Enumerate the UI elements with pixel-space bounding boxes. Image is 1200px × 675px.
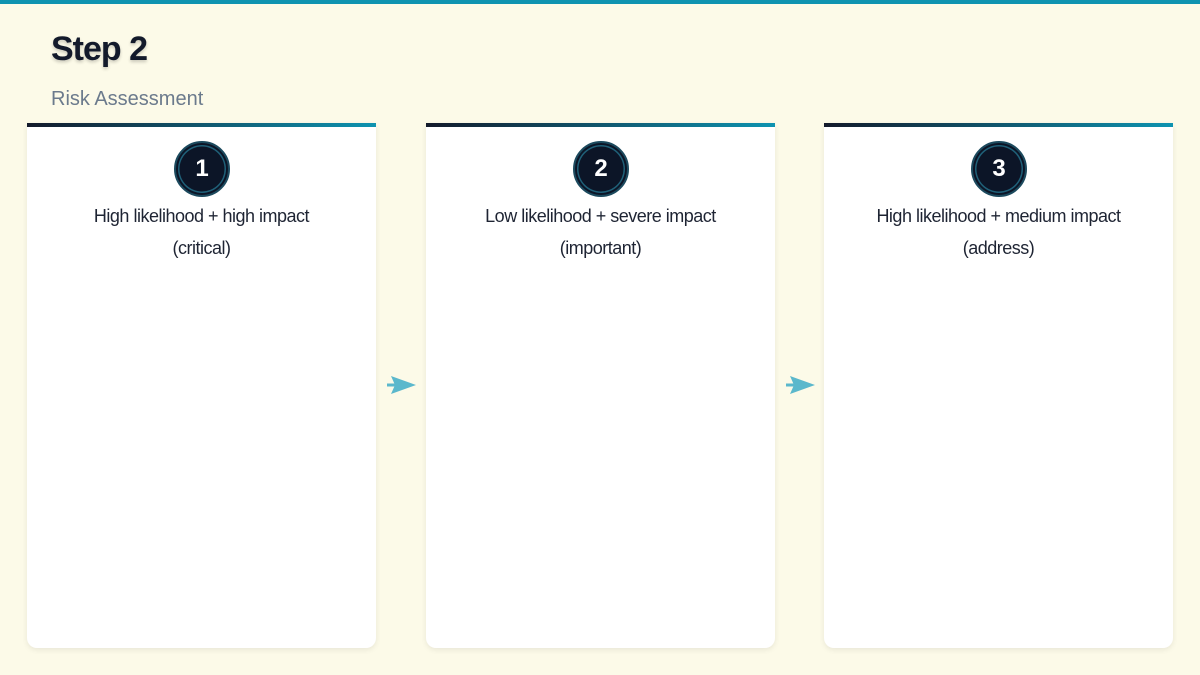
arrow 2: [786, 376, 815, 394]
icon: number 1: [174, 141, 230, 197]
text: card 1: High likelihood + high impact: [94, 206, 309, 226]
panel: card 2: [426, 123, 775, 648]
icon: number 1: 1: [195, 155, 209, 182]
panel: card 1: [27, 123, 376, 648]
icon: number 2: [573, 141, 629, 197]
icon: number 2: 2: [594, 155, 608, 182]
text: card 3: High likelihood + medium impact: [876, 206, 1121, 226]
panel: card 3: [824, 123, 1173, 648]
text: card 3: (address): [963, 238, 1034, 258]
title: Step 2: [51, 30, 147, 68]
icon: number 3: 3: [992, 155, 1006, 182]
text: card 3: [876, 206, 1121, 258]
text: card 1: (critical): [172, 238, 230, 258]
text: card 1: [94, 206, 310, 258]
text: card 2: Low likelihood + severe impact: [485, 206, 716, 226]
subtitle: Risk Assessment: [51, 88, 203, 110]
arrow 1: [387, 376, 416, 394]
text: card 2: [485, 206, 716, 258]
text: card 2: (important): [560, 238, 641, 258]
icon: number 3: [971, 141, 1027, 197]
